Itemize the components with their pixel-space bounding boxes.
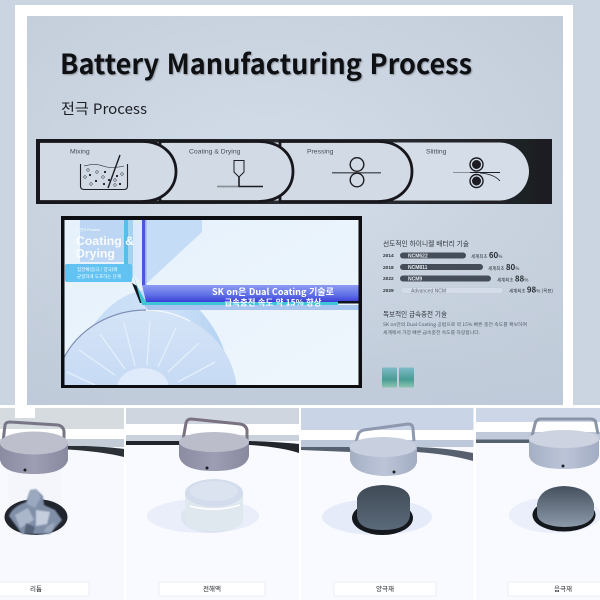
screen caption box: 균일하게 도포하는 단계 — [77, 273, 121, 280]
row 2022: 2022 — [383, 276, 394, 282]
black ring — [352, 508, 413, 535]
screen title: Drying — [76, 246, 115, 260]
lid and handle — [179, 419, 249, 471]
tab: coating and drying — [160, 142, 293, 202]
nozzle body — [80, 220, 202, 286]
panel: high nickel technology — [382, 238, 553, 388]
screen subtitle: SK on은 Dual Coating 기술로 — [212, 285, 334, 298]
anode powder — [537, 486, 594, 527]
screen title — [76, 227, 134, 260]
screen caption box — [65, 264, 132, 282]
label — [334, 582, 436, 596]
black ring — [532, 506, 596, 532]
screen title: Coating & — [76, 234, 134, 248]
row 2018 — [383, 262, 519, 273]
row 2029: 2029 — [383, 288, 394, 294]
fast charging description: 세계에서 가장 빠른 급속충전 속도를 자랑합니다. — [383, 329, 480, 336]
coating band — [132, 270, 359, 310]
title: Battery Manufacturing Process — [61, 43, 473, 83]
row 2029: Advanced NCM — [411, 288, 446, 294]
tab: slitting — [395, 142, 529, 200]
row 2018: NCM811 — [408, 265, 428, 271]
exhibition wall backdrop — [0, 0, 600, 408]
shadow — [147, 499, 259, 533]
jar glass — [8, 470, 62, 528]
hole — [4, 499, 68, 535]
row 2029: 세계최초 98% (목표) — [509, 284, 553, 296]
label: slitting: Slitting — [426, 148, 447, 156]
lid and handle — [350, 424, 417, 476]
screen subtitle — [212, 287, 334, 306]
row 2014: 세계최초 60% — [471, 250, 502, 261]
title: Battery Manufacturing Process — [60, 42, 472, 82]
cylinder roller — [94, 290, 224, 352]
label — [159, 582, 265, 596]
heading: fast charging: 독보적인 급속충전 기술 — [383, 308, 447, 318]
row 2022 — [383, 274, 528, 284]
fast charging description — [383, 321, 527, 336]
label: 음극재 — [554, 583, 572, 593]
icon: slitting rollers — [453, 158, 500, 188]
tab: mixing — [38, 142, 176, 202]
row 2022: NCM9 — [408, 276, 422, 282]
process strip — [36, 139, 552, 204]
label: coating and drying: Coating & Drying — [189, 148, 241, 156]
photo: anode — [476, 408, 600, 600]
screen title: 2. 전극 Process — [76, 227, 100, 232]
icon: coating nozzle — [217, 160, 263, 186]
fast charging description: SK on만의 Dual Coating 공법으로 약 15% 빠른 충전 속도를 확보하여 — [383, 321, 527, 328]
lid and handle — [529, 419, 599, 469]
icon: pressing rollers — [332, 158, 381, 187]
row 2022: 세계최초 88% — [497, 274, 528, 284]
photo: cathode — [301, 408, 474, 600]
row 2018: 세계최초 80% — [488, 262, 519, 273]
label: 양극재 — [376, 583, 394, 593]
photo: lithium — [0, 408, 124, 600]
icon: certificate cards — [382, 368, 414, 388]
row 2018: 2018 — [383, 265, 394, 271]
label: mixing: Mixing — [70, 148, 90, 156]
electrolyte jar — [185, 479, 243, 531]
label: 리튬 — [30, 583, 42, 593]
label — [508, 582, 600, 596]
video screen — [61, 216, 362, 388]
icon: mixing tank — [80, 155, 128, 190]
row 2014 — [383, 250, 502, 261]
row 2029 — [383, 284, 553, 296]
cathode powder — [357, 485, 410, 530]
white divider band — [0, 405, 600, 600]
lid and handle — [0, 422, 68, 474]
shadow — [322, 499, 432, 535]
photo: electrolyte — [126, 408, 299, 600]
wheel — [64, 309, 236, 385]
label: pressing: Pressing — [307, 148, 334, 156]
lithium rocks — [9, 489, 62, 534]
row 2014: 2014 — [383, 253, 394, 259]
screen caption box: 집전체(음극 / 양극)에 — [77, 266, 117, 273]
label — [0, 582, 89, 596]
subtitle: 전극 Process — [61, 98, 147, 119]
heading: high nickel: 선도적인 하이니켈 배터리 기술 — [383, 238, 469, 248]
screen subtitle: 급속충전 속도 약 15% 향상 — [224, 296, 322, 308]
row 2014: NCM622 — [408, 254, 428, 260]
label: 전해액 — [203, 583, 221, 593]
tab: pressing — [280, 142, 412, 202]
shadow — [509, 497, 600, 533]
